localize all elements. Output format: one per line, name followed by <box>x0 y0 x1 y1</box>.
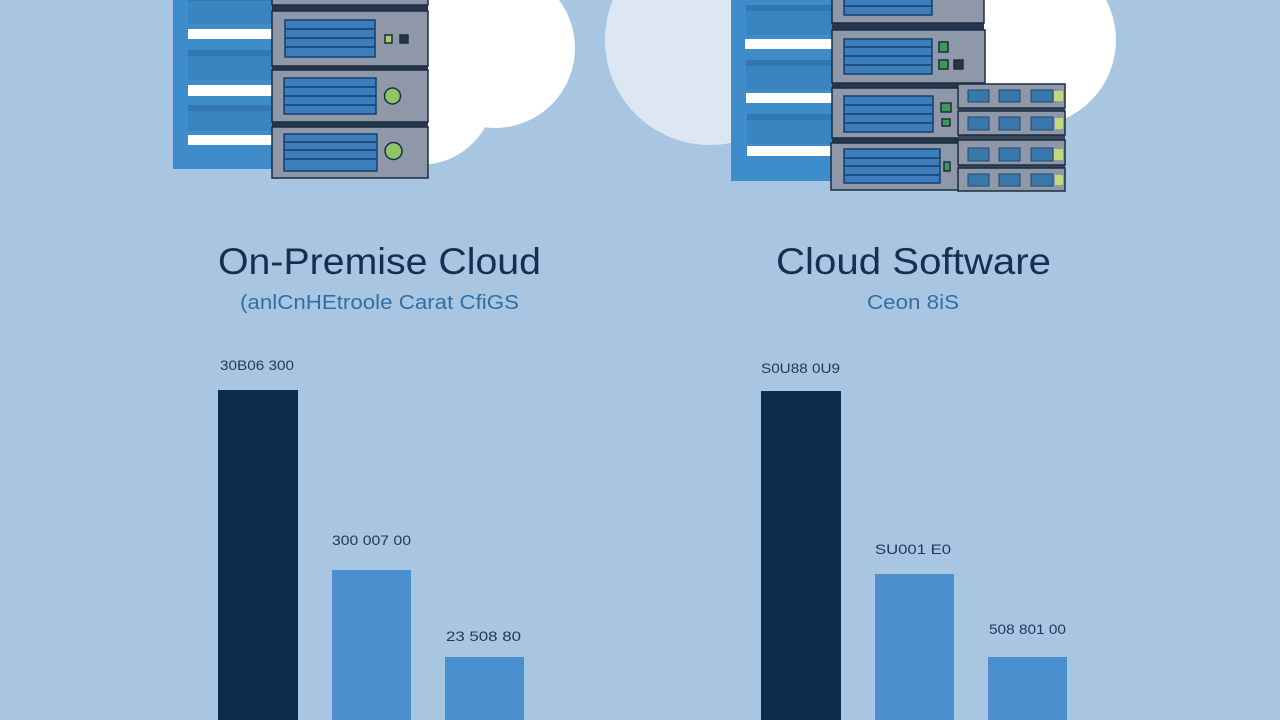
bar 2 with value: SU001 E0 <box>875 541 951 557</box>
bar 3 with value <box>988 621 1067 720</box>
bar chart: cloud software <box>761 360 1067 720</box>
subtitle: on-premise: (anlCnHEtroole Carat CfiGS <box>240 292 519 314</box>
icon: blue server rack left <box>173 0 273 169</box>
panel: on-premise column <box>173 0 575 720</box>
bar 1 with value: 30B06 300 <box>220 357 294 373</box>
panel: cloud software column <box>605 0 1116 720</box>
icon: server stack right <box>831 0 985 190</box>
bar chart: on-premise <box>218 357 524 720</box>
heading: Cloud Software: Cloud Software <box>776 241 1051 282</box>
subtitle: cloud software: Ceon 8iS <box>867 292 959 314</box>
heading: On-Premise Cloud: On-Premise Cloud <box>218 241 541 282</box>
bar 1 with value <box>218 357 298 720</box>
bar 2 with value: 300 007 00 <box>332 532 411 548</box>
bar 3 with value: 23 508 80 <box>446 628 521 644</box>
bar 2 with value <box>332 532 411 720</box>
bar 3 with value <box>445 628 524 720</box>
bar 3 with value: 508 801 00 <box>989 621 1066 637</box>
icon: small drive units <box>958 84 1065 191</box>
bar 1 with value: S0U88 0U9 <box>761 360 840 376</box>
icon: server stack left <box>272 0 428 178</box>
bar 2 with value <box>875 541 954 720</box>
icon: white cloud left <box>345 0 575 165</box>
icon: blue server rack right <box>731 0 833 181</box>
bar 1 with value <box>761 360 841 720</box>
icon: two-tone cloud right <box>605 0 1116 145</box>
